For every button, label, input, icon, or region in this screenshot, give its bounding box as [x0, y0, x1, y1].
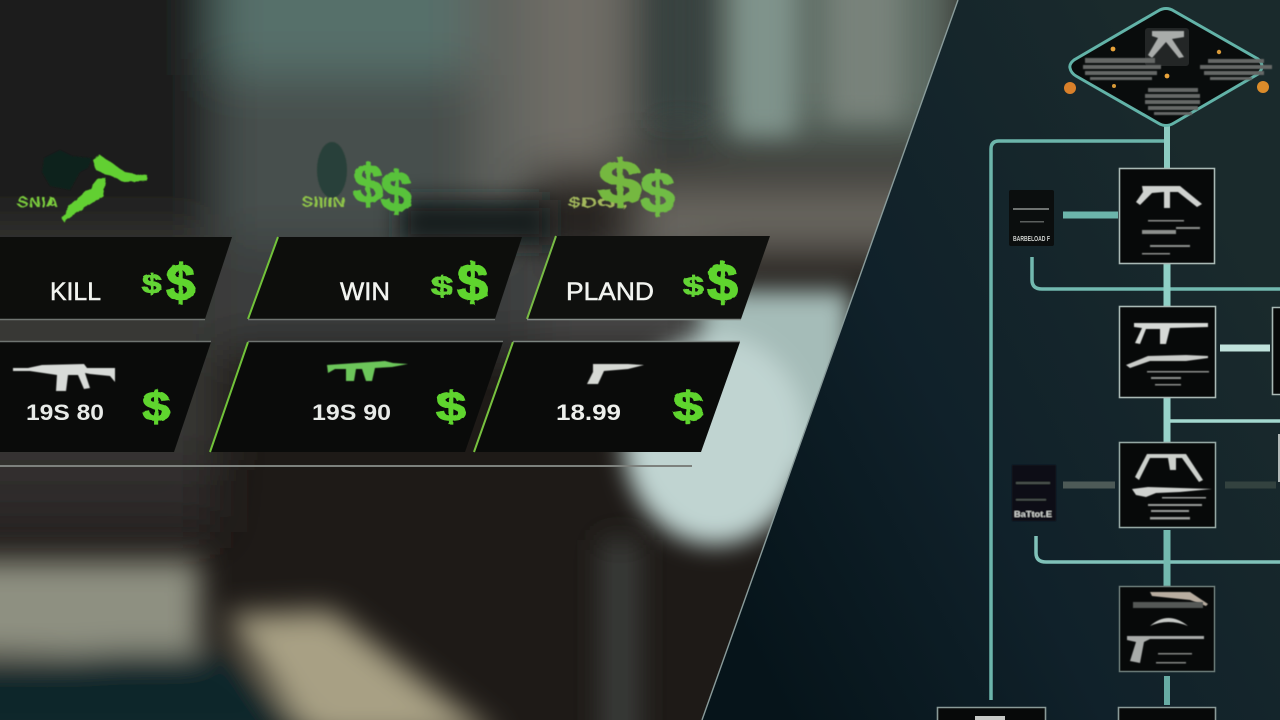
- card: win: $: [431, 271, 453, 301]
- floating reward: win: [302, 142, 412, 223]
- node: weapon box 2: [1120, 306, 1216, 398]
- node: faded small box: BaTtot.E: [1014, 510, 1053, 519]
- floating reward: kill: SNIA: [17, 194, 58, 211]
- panel: reward cards: [0, 142, 770, 466]
- node: partial box right: [1272, 308, 1280, 394]
- card: plant: $: [707, 254, 738, 312]
- badge: right orange: [1257, 81, 1269, 93]
- node: bottom left box: [938, 708, 1046, 720]
- node: partial faded box right: [1278, 434, 1280, 482]
- node: small box top: [1009, 190, 1054, 246]
- card: rifle price 1: $: [142, 383, 170, 430]
- card: rifle price 2: 19S 90: [312, 400, 391, 425]
- node: root diamond: [1070, 8, 1272, 126]
- panel: weapon upgrade tree: [702, 0, 1280, 720]
- card: pistol price: [474, 342, 740, 452]
- floating reward: win: $: [353, 153, 383, 215]
- card: rifle price 1: 19S 80: [26, 400, 104, 425]
- icon: green rifle: [327, 361, 408, 381]
- node: weapon box 3: [1120, 442, 1216, 528]
- card: kill: $: [142, 269, 162, 299]
- icon: pistol: [587, 364, 644, 384]
- card: plant: [527, 236, 770, 320]
- floating reward: win: SIIIIN: [302, 194, 345, 211]
- node: weapon box 1: [1120, 168, 1214, 264]
- icon: assault rifle: [13, 364, 115, 391]
- card: win: $: [457, 254, 488, 312]
- node: bottom centre box: [1118, 708, 1216, 720]
- floating reward: plant: $: [640, 161, 675, 225]
- card: pistol price: $: [673, 383, 703, 430]
- node: small box top: BARBELOAD F: [1013, 236, 1051, 243]
- card: plant: $: [683, 271, 704, 301]
- card: kill: [0, 237, 232, 320]
- floating reward: plant: [568, 149, 675, 225]
- card: rifle price 1: [0, 342, 211, 452]
- node: faded small box: [1012, 465, 1056, 521]
- floating reward: plant: $DOI,: [568, 194, 628, 210]
- floating reward: win: $: [381, 160, 412, 223]
- card: pistol price: 18.99: [556, 400, 621, 425]
- card: rifle price 2: [210, 342, 503, 452]
- card: kill: KILL: [50, 278, 101, 306]
- tree connectors: [991, 126, 1280, 705]
- card: win: WIN: [340, 278, 390, 306]
- floating reward: kill: [17, 150, 148, 222]
- card: rifle price 2: $: [436, 383, 466, 430]
- card: win: [248, 237, 522, 320]
- card: kill: $: [166, 254, 195, 312]
- node: weapon box 4: [1120, 586, 1214, 672]
- card: plant: PLAND: [566, 278, 654, 306]
- floating reward: plant: $: [598, 149, 642, 216]
- badge: left orange: [1064, 82, 1076, 94]
